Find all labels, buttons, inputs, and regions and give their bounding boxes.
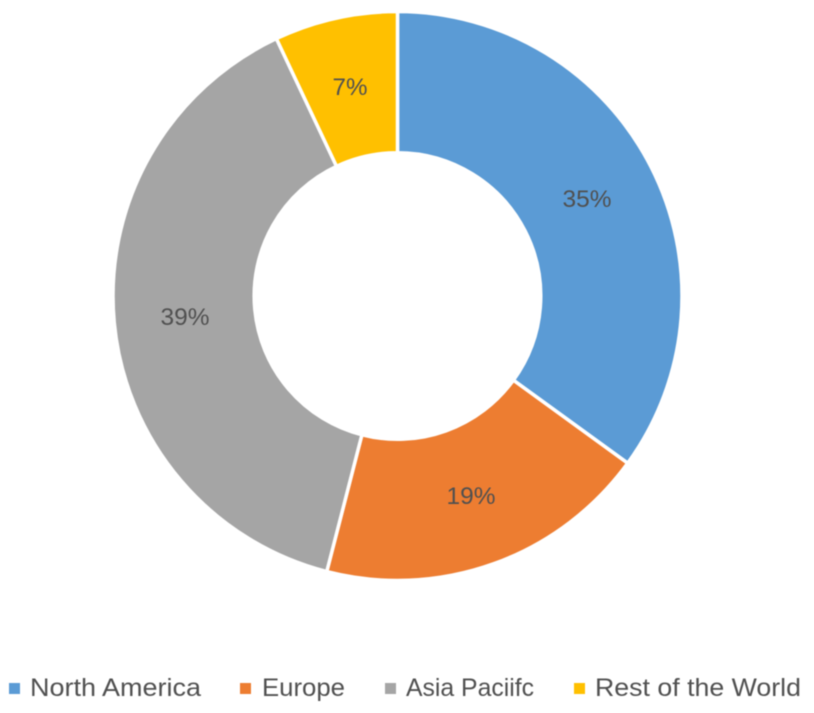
legend item: Asia Paciifc: Asia Paciifc [406, 674, 534, 702]
donut chart [113, 12, 682, 581]
segment: North America 35% [398, 12, 682, 463]
label: 7%: 7% [332, 74, 368, 101]
segment: Rest of the World 7% [276, 12, 398, 166]
legend [9, 674, 801, 702]
label: 35%: 35% [562, 186, 612, 213]
legend item: North America: North America [30, 674, 201, 702]
segment: Europe 19% [327, 380, 628, 581]
data labels [160, 74, 612, 510]
legend item: Europe: Europe [262, 674, 345, 702]
legend item: Rest of the World: Rest of the World [595, 674, 801, 702]
label: 19%: 19% [446, 483, 496, 510]
segment: Asia Pacific 39% [113, 39, 362, 572]
label: 39%: 39% [160, 304, 210, 331]
